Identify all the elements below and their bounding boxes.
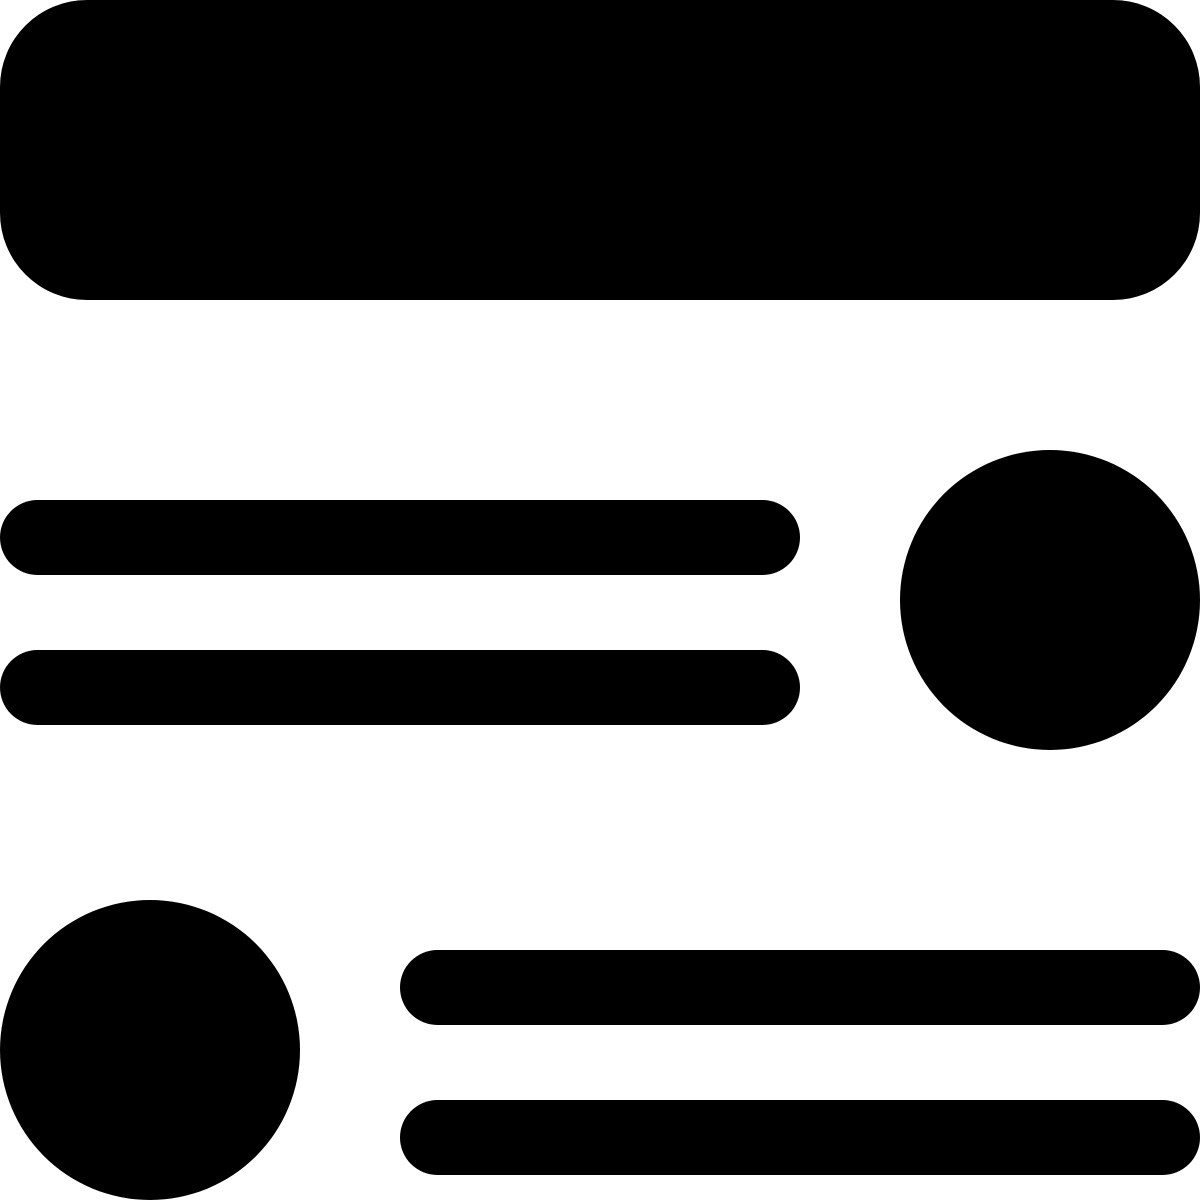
circle: row 2 left	[0, 900, 300, 1200]
circle: row 1 right	[900, 450, 1200, 750]
text line: row 2 second	[400, 1100, 1200, 1175]
text line: row 1 second	[0, 650, 800, 725]
text line: row 2 first	[400, 950, 1200, 1025]
text line: row 1 first	[0, 500, 800, 575]
header bar	[0, 0, 1200, 300]
